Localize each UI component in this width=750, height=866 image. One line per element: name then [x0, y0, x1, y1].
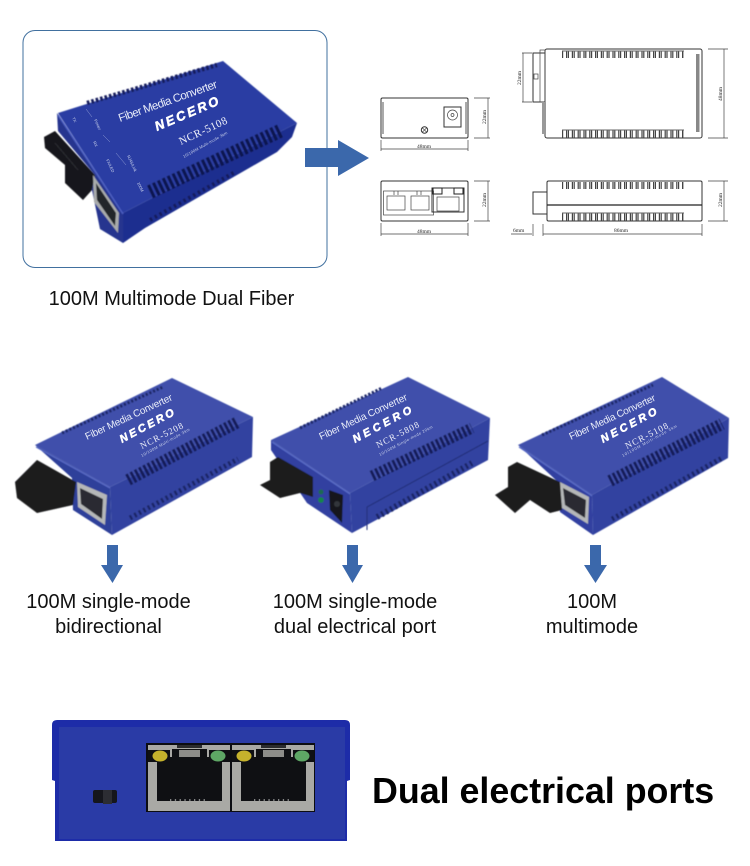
printed labels: indicators	[71, 109, 145, 192]
label: 100M single-mode dual electrical port: dual electrical port	[274, 616, 437, 638]
side vent row	[150, 130, 282, 192]
product: NCR-5208 single-mode bidirectional converter: Fiber Media Converter	[84, 392, 175, 443]
panel: hero product photo	[23, 30, 327, 268]
label: 100M single-mode bidirectional: 100M single-mode	[26, 591, 191, 613]
device top face	[58, 61, 297, 213]
RJ45 port	[560, 482, 589, 524]
printed labels: indicators: TX	[71, 116, 78, 123]
technical drawing: front view with power jack: 48mm	[417, 144, 432, 150]
technical drawing: side view: 6mm	[513, 228, 525, 234]
technical drawing: rear view with ports	[381, 181, 490, 236]
top vent row	[87, 65, 217, 103]
label: 100M single-mode bidirectional: bidirectional	[55, 616, 162, 638]
technical drawing: side view: 86mm	[614, 228, 629, 234]
lower vent row	[150, 172, 235, 220]
printed labels: indicators: FX/LED	[105, 158, 116, 173]
product: NCR-5808 dual electrical port converter	[260, 377, 490, 533]
technical drawing: front view with power jack	[381, 98, 490, 151]
technical drawing: side view: 22mm	[718, 192, 724, 207]
product: NCR-5808 dual electrical port converter: Fiber Media Converter	[318, 392, 410, 443]
product: NCR-5108 multimode converter	[495, 377, 729, 535]
RJ45 port 2	[232, 745, 314, 811]
icon: bidirectional connector	[15, 460, 76, 513]
technical drawing: top view: 48mm	[718, 86, 724, 101]
RJ45 port	[93, 175, 119, 233]
product: NCR-5108 multimode converter: NCR-5108	[623, 420, 670, 451]
technical drawing: front view with power jack: 22mm	[482, 109, 488, 124]
icon: SC fiber connector	[44, 131, 95, 200]
printed label: Fiber Media Converter: Fiber Media Converter	[117, 79, 219, 125]
printed labels: indicators: Power	[93, 118, 103, 131]
technical drawing: side view	[511, 181, 728, 236]
printed label: NCR-5108: NCR-5108	[177, 115, 230, 148]
caption: 100M Multimode Dual Fiber: 100M Multimode Dual Fiber	[49, 288, 295, 310]
icon: SC connector	[260, 457, 313, 498]
technical drawing: rear view with ports: 22mm	[482, 192, 488, 207]
technical drawing: rear view with ports: 48mm	[417, 229, 432, 235]
product: NCR-5808 dual electrical port converter: 10/100M Single-mode 20km	[378, 424, 434, 457]
product: NCR-5808 dual electrical port converter: NCR-5808	[374, 419, 421, 450]
printed labels: indicators: 100M	[136, 181, 145, 192]
label: 100M multimode: 100M	[567, 591, 617, 613]
heading: Dual electrical ports: Dual electrical ports	[372, 771, 714, 811]
label: 100M single-mode dual electrical port: 100M single-mode	[273, 591, 437, 613]
panel: dual electrical port close-up	[52, 720, 350, 841]
product: NCR-5108 multimode converter: 10/100M Multi-mode 3km	[621, 423, 678, 458]
printed label: spec line: 10/100M Multi-mode 3km	[182, 130, 229, 159]
icon: SC duplex connector	[495, 462, 562, 513]
arrow: down to multimode	[584, 545, 607, 583]
printed labels: indicators: RJ45/Link	[126, 154, 138, 173]
printed labels: indicators: RX	[92, 140, 99, 148]
device front face	[57, 113, 123, 243]
product: NCR-5208 single-mode bidirectional converter	[15, 378, 253, 535]
product: NCR-5208 single-mode bidirectional converter: NCR-5208	[138, 420, 185, 451]
product: NCR-5208 single-mode bidirectional converter: NECERO	[118, 407, 177, 446]
arrow: photo to drawings	[305, 140, 369, 176]
icon: status LEDs	[318, 490, 324, 503]
arrow: down to single-mode dual electrical port	[342, 545, 363, 583]
icon: power jack	[329, 490, 343, 523]
arrow: down to single-mode bidirectional	[101, 545, 123, 583]
printed label: NECERO: NECERO	[152, 93, 221, 134]
label: 100M multimode: multimode	[546, 616, 638, 638]
technical drawing: top view: 22mm	[517, 70, 523, 85]
product: NCR-5808 dual electrical port converter: NECERO	[351, 404, 414, 446]
RJ45 port	[77, 482, 107, 525]
technical drawing: top view	[517, 49, 728, 138]
RJ45 port 1	[148, 745, 230, 811]
device side face	[123, 123, 297, 243]
product: NCR-5208 single-mode bidirectional converter: 10/100M Multi-mode 3km	[140, 427, 191, 458]
product: NCR-5108 multimode converter: NECERO	[599, 406, 660, 446]
product: NCR-5108 multimode converter: Fiber Media Converter	[568, 393, 658, 443]
icon: slide switch	[93, 790, 117, 804]
